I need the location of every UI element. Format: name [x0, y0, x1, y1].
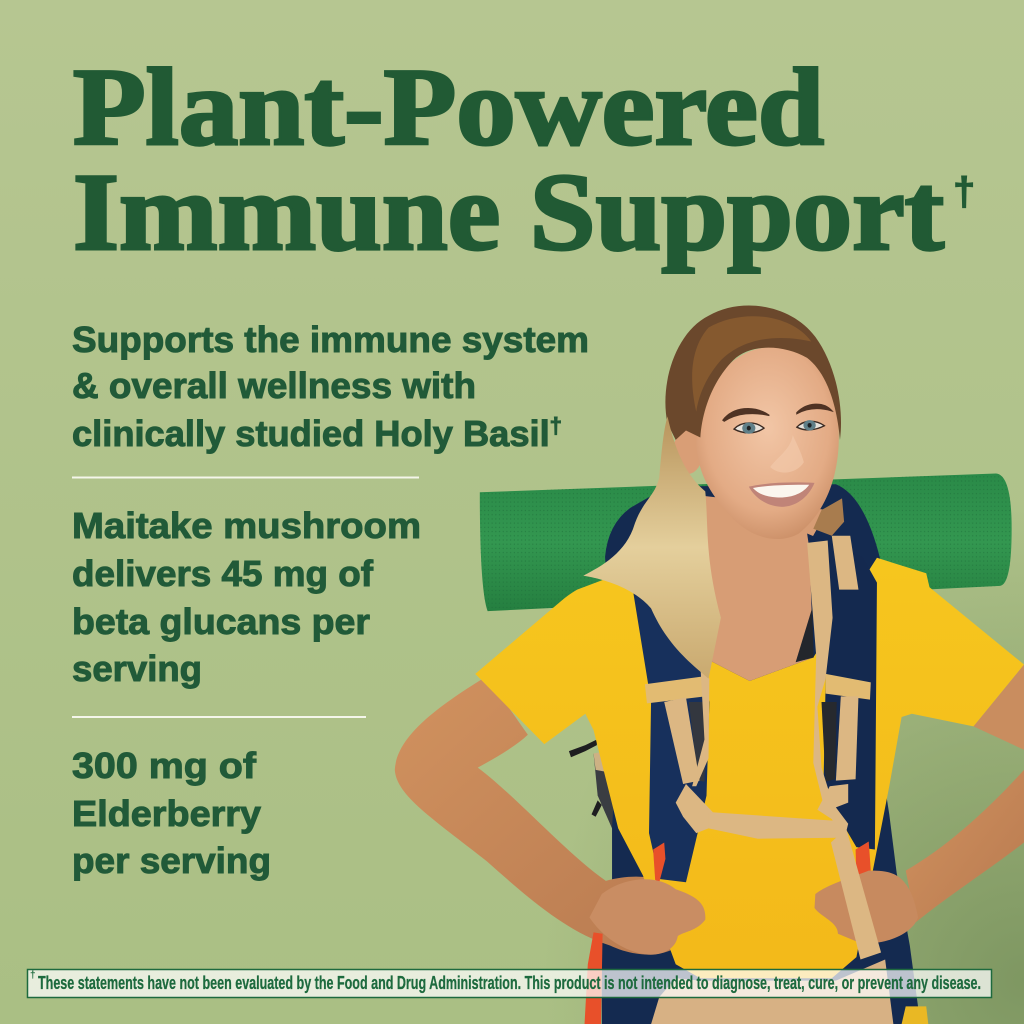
red buckle tabs [585, 842, 871, 1024]
left hand [589, 879, 705, 955]
backpack side pocket and cord [569, 739, 626, 842]
right forearm [906, 770, 1024, 922]
text block: elderberry claim: 300 mg of [72, 745, 257, 786]
text block: maitake mushroom claim: Maitake mushroom [72, 505, 421, 546]
text block: immune system claim: Supports the immune system [72, 319, 589, 360]
right upper arm [973, 665, 1024, 750]
backpack body [602, 484, 922, 1024]
title: † [953, 170, 975, 214]
nose [770, 435, 804, 473]
yellow t-shirt [475, 558, 1024, 978]
neck and chest [692, 496, 828, 681]
long dangling strap [831, 828, 881, 960]
text block: maitake mushroom claim [72, 505, 421, 689]
hair top [665, 306, 841, 440]
text block: immune system claim: & overall wellness with [72, 365, 476, 406]
text block: maitake mushroom claim: serving [72, 648, 202, 689]
blonde ponytail hair [583, 416, 721, 679]
title [73, 46, 975, 273]
hip belt [651, 960, 893, 1024]
eyebrows [723, 409, 769, 421]
disclaimer bar [28, 970, 992, 998]
left backpack strap [631, 566, 709, 882]
text block: immune system claim [72, 319, 589, 454]
smile [749, 482, 815, 507]
face [696, 347, 839, 539]
text block: immune system claim: † [550, 413, 562, 438]
head [583, 306, 841, 679]
rolled green yoga mat [480, 474, 1012, 611]
photo: smiling hiker with backpack and rolled mat [395, 306, 1024, 1024]
disclaimer bar: † [30, 970, 36, 981]
ear [673, 429, 703, 474]
tan webbing straps [645, 498, 871, 840]
text block: elderberry claim: per serving [72, 840, 271, 881]
text block: elderberry claim: Elderberry [72, 793, 261, 834]
eyes [734, 423, 764, 433]
text block: maitake mushroom claim: delivers 45 mg of [72, 553, 374, 594]
text block: maitake mushroom claim: beta glucans per [72, 601, 370, 642]
title: Immune Support [73, 151, 944, 273]
title: Plant-Powered [73, 46, 824, 168]
right backpack strap [807, 533, 877, 849]
text block: elderberry claim [72, 745, 271, 881]
text block: immune system claim: clinically studied Holy Basil [72, 413, 546, 454]
right hand [815, 871, 918, 943]
left arm [395, 676, 703, 955]
